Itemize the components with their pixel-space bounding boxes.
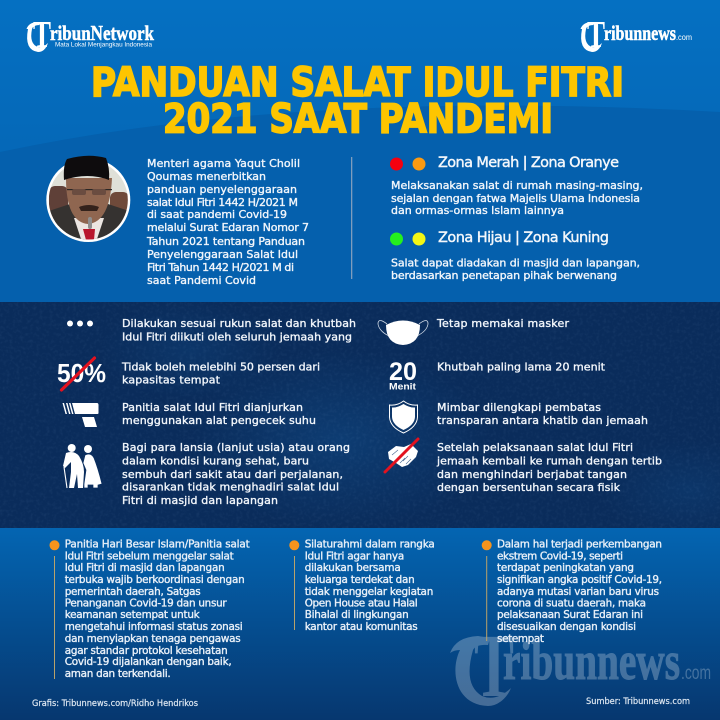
- panel: extreme development note: corona di suatu daerah, maka: [497, 598, 646, 610]
- panel: extreme development note: terdapat peningkatan yang: [497, 562, 634, 574]
- text block: red and orange zone: Melaksanakan salat di rumah masing-masing,: [391, 179, 643, 192]
- logo: TribunNetwork: Mata Lokal Menjangkau Indonesia: [55, 42, 153, 48]
- text block: minister intro: [146, 157, 309, 287]
- logo: TribunNetwork: [26, 14, 154, 56]
- panel: extreme development note: Dalam hal terjadi perkembangan: [497, 538, 662, 550]
- title: [91, 60, 624, 142]
- panel: coordination note: Idul Fitri di masjid dan lapangan: [65, 562, 225, 574]
- panel: family gathering note: Silaturahmi dalam rangka: [305, 538, 435, 550]
- background: blue top section: [0, 0, 720, 303]
- panel: coordination note: agar standar protokol kesehatan: [65, 645, 228, 657]
- text block: minister intro: melalui Surat Edaran Nomor 7: [147, 221, 309, 234]
- panel: coordination note: pemerintah daerah, Satgas: [65, 586, 201, 598]
- text block: sermon length: Khutbah paling lama 20 menit: [437, 360, 606, 374]
- text block: rukun salat: Dilakukan sesuai rukun salat dan khutbah: [122, 317, 356, 330]
- panel: coordination note: aman dan terkendali.: [65, 668, 171, 680]
- panel: family gathering note: [289, 538, 435, 633]
- text block: minister intro: Menteri agama Yaqut Cholil: [147, 157, 300, 170]
- text block: pulpit barrier: [437, 401, 648, 427]
- text block: capacity: kapasitas tempat: [122, 374, 221, 386]
- panel: family gathering note: kantor atau komunitas: [305, 621, 418, 633]
- logo: Tribunnews.com: [580, 14, 692, 56]
- icon: thermometer gun: [62, 403, 98, 427]
- watermark: Tribunnews: T: [474, 617, 514, 716]
- icon: crossed 50 percent: 50%: [57, 358, 106, 388]
- watermark: Tribunnews: [450, 617, 711, 716]
- panel: coordination note: dan menyiapkan tenaga pengawas: [65, 633, 241, 645]
- text block: minister intro: Penyelenggaraan Salat Idul: [147, 248, 298, 261]
- credit: graphics: Grafis: Tribunnews.com/Ridho Hendrikos: [32, 699, 198, 709]
- panel: coordination note: keamanan setempat untuk: [65, 609, 200, 621]
- text block: capacity: Tidak boleh melebihi 50 persen dari: [121, 360, 320, 374]
- text block: after prayer: Setelah pelaksanaan salat Idul Fitri: [437, 441, 633, 454]
- text block: green and yellow zone: Salat dapat diadakan di masjid dan lapangan,: [391, 256, 640, 270]
- panel: coordination note: mengetahui informasi status zonasi: [65, 621, 243, 633]
- panel: extreme development note: pelaksanaan Surat Edaran ini: [497, 609, 643, 621]
- panel: family gathering note: Open House atau Halal: [305, 598, 418, 610]
- text block: red and orange zone: [391, 179, 643, 217]
- heading: red and orange zone: Zona Merah | Zona Oranye: [438, 155, 619, 171]
- panel: family gathering note: keluarga terdekat dan: [305, 574, 415, 586]
- panel: family gathering note: Idul Fitri agar hanya: [305, 550, 404, 562]
- text block: minister intro: panduan penyelenggaraan: [147, 183, 297, 196]
- icon: crossed handshake: [385, 439, 418, 472]
- panel: extreme development note: [482, 538, 662, 645]
- text block: pulpit barrier: transparan antara khatib dan jemaah: [437, 414, 648, 427]
- panel: extreme development note: adanya mutasi varian baru virus: [497, 586, 659, 598]
- icon: three dots: [67, 320, 93, 326]
- text block: elderly advice: dalam kondisi kurang sehat, baru: [122, 454, 309, 468]
- panel: family gathering note: Bihalal di lingkungan: [305, 609, 409, 621]
- background: bottom blue gradient: [0, 528, 720, 720]
- photo: minister portrait: [46, 156, 132, 245]
- panel: coordination note: Covid-19 dijalankan dengan baik,: [65, 656, 232, 668]
- logo: Tribunnews.com: T: [587, 14, 605, 56]
- panel: coordination note: Idul Fitri sebelum menggelar salat: [65, 550, 234, 562]
- panel: extreme development note: signifikan angka positif Covid-19,: [497, 574, 662, 586]
- text block: minister intro: di saat pandemi Covid-19: [147, 208, 287, 221]
- text block: minister intro: Tahun 2021 tentang Panduan: [146, 235, 305, 248]
- icon: shield: [390, 401, 418, 433]
- icon: 20 minutes: Menit: [389, 382, 417, 392]
- text block: green and yellow zone: berdasarkan penetapan pihak berwenang: [391, 269, 617, 282]
- panel: extreme development note: ekstrem Covid-19, seperti: [497, 550, 623, 562]
- text block: after prayer: jemaah kembali ke rumah dengan tertib: [436, 454, 662, 468]
- logo: TribunNetwork: ribunNetwork: [50, 21, 154, 45]
- icon: red and orange zone dots: [390, 158, 426, 170]
- logo: Tribunnews.com: .com: [676, 33, 692, 42]
- text block: elderly advice: disarankan tidak menghadiri salat Idul: [122, 480, 339, 494]
- text block: pulpit barrier: Mimbar dilengkapi pembatas: [437, 401, 601, 414]
- text block: rukun salat: Idul Fitri diikuti oleh seluruh jemaah yang: [122, 330, 352, 344]
- text block: temperature check: Panitia salat Idul Fitri dianjurkan: [122, 401, 303, 414]
- text block: elderly advice: sembuh dari sakit atau dari perjalanan,: [122, 468, 343, 481]
- title: 2021 SAAT PANDEMI: [163, 96, 553, 142]
- text block: after prayer: [436, 441, 662, 494]
- logo: TribunNetwork: T: [33, 14, 51, 56]
- panel: family gathering note: tidak menggelar kegiatan: [305, 586, 433, 598]
- icon: elderly couple: [63, 444, 102, 488]
- logo: Tribunnews.com: ribunnews: [604, 21, 676, 45]
- text block: after prayer: dengan bersentuhan secara fisik: [437, 481, 621, 494]
- panel: coordination note: Penanganan Covid-19 dan unsur: [65, 598, 227, 610]
- panel: dark crowd band: [0, 300, 720, 540]
- text block: green and yellow zone: [391, 256, 640, 282]
- text block: elderly advice: Bagi para lansia (lanjut usia) atau orang: [122, 441, 350, 454]
- text block: red and orange zone: dan ormas-ormas Islam lainnya: [391, 204, 564, 217]
- text block: elderly advice: [122, 441, 350, 507]
- text block: minister intro: Fitri Tahun 1442 H/2021 M di: [147, 261, 294, 274]
- panel: extreme development note: disesuaikan dengan kondisi: [497, 621, 636, 633]
- panel: extreme development note: setempat: [497, 633, 544, 645]
- panel: coordination note: terbuka wajib berkoordinasi dengan: [65, 574, 245, 586]
- text block: mask: Tetap memakai masker: [436, 317, 569, 330]
- icon: 20 minutes: 20: [389, 358, 417, 386]
- text block: temperature check: [122, 401, 316, 427]
- icon: face mask: [378, 320, 428, 345]
- panel: family gathering note: dilakukan bersama: [305, 562, 401, 574]
- text block: temperature check: menggunakan alat pengecek suhu: [122, 414, 316, 427]
- text block: minister intro: saat Pandemi Covid: [147, 274, 256, 287]
- credit: source: Sumber: Tribunnews.com: [586, 697, 690, 707]
- title: PANDUAN SALAT IDUL FITRI: [91, 60, 624, 106]
- text block: red and orange zone: sejalan dengan fatwa Majelis Ulama Indonesia: [391, 192, 640, 205]
- text block: minister intro: salat Idul Fitri 1442 H/2021 M: [147, 196, 298, 209]
- panel: coordination note: Panitia Hari Besar Islam/Panitia salat: [65, 538, 250, 550]
- icon: green and yellow zone dots: [390, 232, 426, 246]
- text block: elderly advice: Fitri di masjid dan lapangan: [122, 494, 278, 507]
- text block: rukun salat: [122, 317, 356, 344]
- text block: minister intro: Qoumas menerbitkan: [147, 170, 266, 183]
- panel: coordination note: [50, 538, 250, 680]
- heading: green and yellow zone: Zona Hijau | Zona Kuning: [438, 230, 609, 246]
- text block: capacity: [121, 360, 320, 386]
- text block: after prayer: dan menghindari berjabat tangan: [437, 468, 627, 481]
